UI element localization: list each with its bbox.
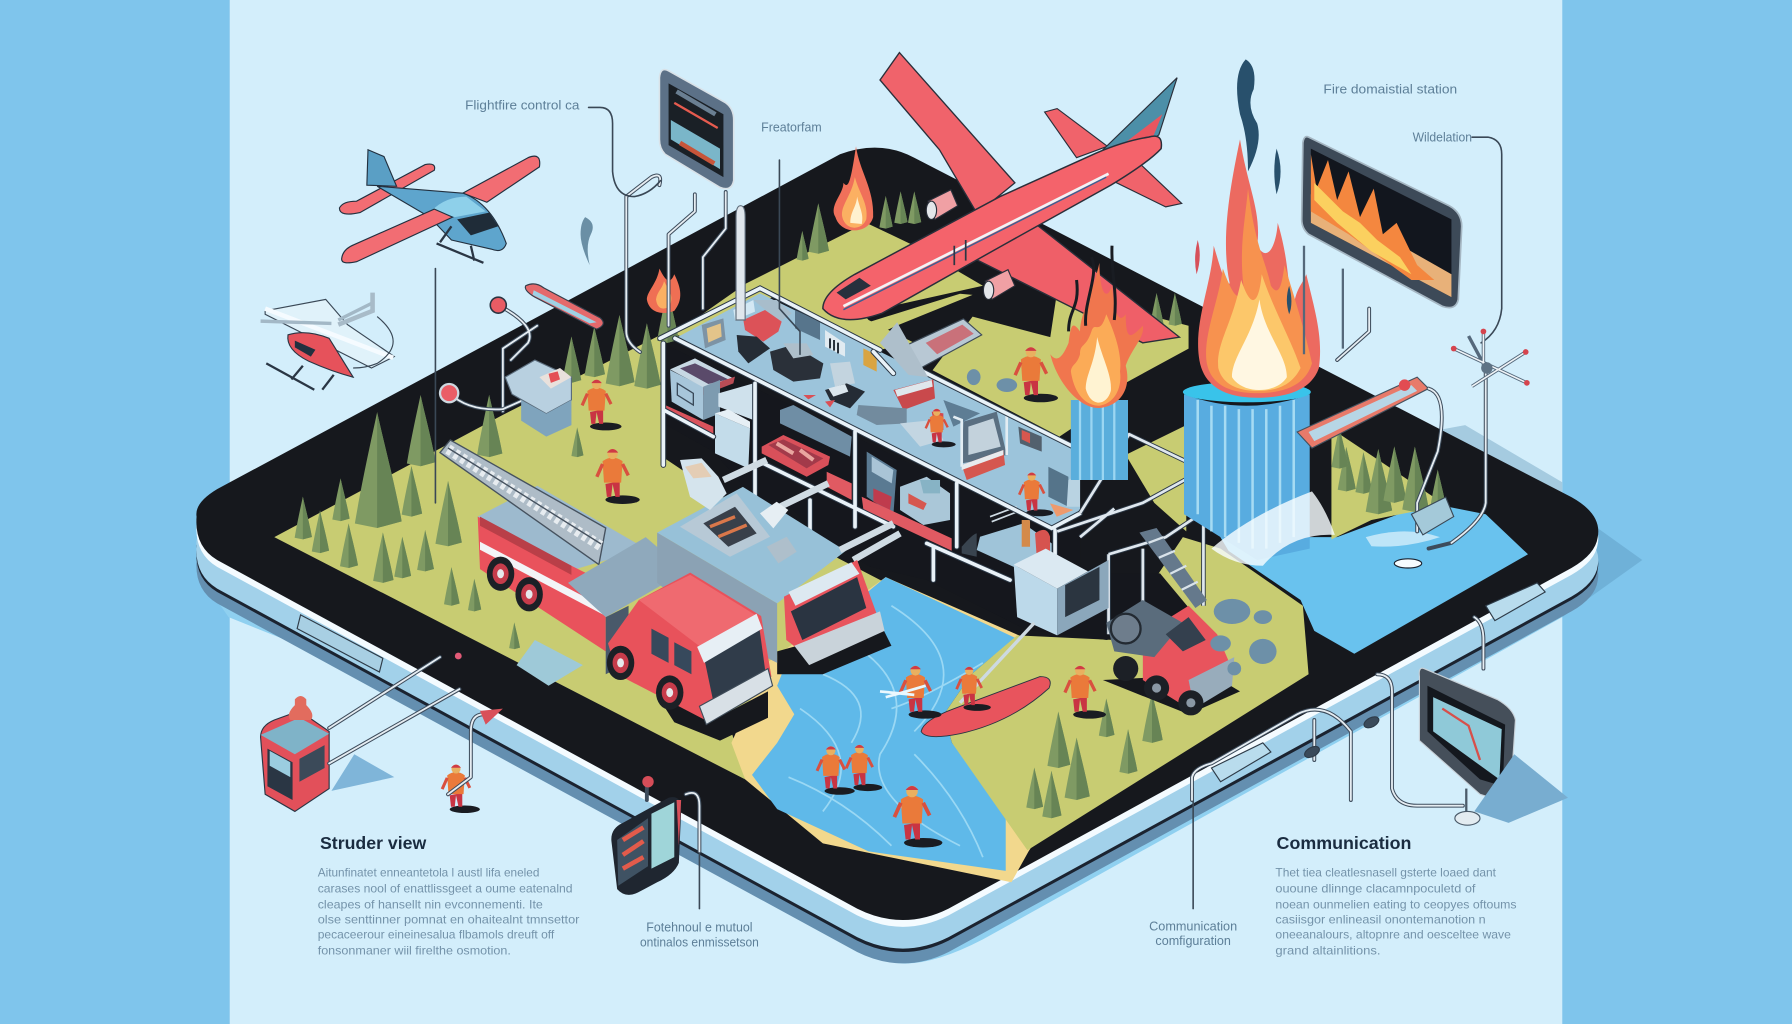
handheld tablet lower [611,797,681,895]
terrain bands behind building [760,265,914,350]
lower room rear wall [780,405,852,457]
big airplane [823,53,1182,343]
red floor main [862,497,952,551]
tail plane [339,164,435,214]
worker on deck [926,409,956,447]
edge button left [297,615,383,672]
water column big [1183,382,1311,560]
large monitor with flame map [1302,137,1462,308]
junction box [440,360,571,437]
second truck [657,458,900,665]
side buttons [1211,583,1545,782]
command building cross-section [660,288,1193,640]
red floor [665,405,713,434]
medium flame [1050,246,1143,408]
tree cluster bottom [1026,692,1163,818]
text block: struder view: fonsonmaner wiil firelthe osmotion. [318,943,511,957]
label: fire station: Fire domaistial station [1323,83,1457,97]
dark vehicle shadows [640,623,1240,741]
text block: struder view: carases nool of enattlissgeet a oume eatenalnd [318,882,573,896]
text block: struder view [318,866,579,957]
deck and floor beams [660,288,1080,580]
pipes from top tablet [626,175,745,352]
left terrain [274,334,886,779]
horizontal stabilizers [1045,109,1182,207]
fire truck rear unit with ladder [440,440,686,674]
river ripples [789,606,983,857]
stair [1139,528,1207,608]
connector box [568,537,686,617]
truck top deck [478,486,646,571]
right lower terrain [944,537,1309,850]
cabinet [1014,549,1109,635]
red floor segment [827,472,852,500]
truck body side [478,517,606,651]
label: communication configuration: Communication [1149,919,1237,933]
label: wildfire: Wildelation [1413,131,1472,145]
tree cluster right [1331,427,1445,514]
monitor legs [1304,246,1343,354]
device shadow [197,425,1642,964]
helicopter [261,293,394,390]
far wing [463,156,540,202]
first truck cab [517,573,773,725]
label: technical: ontinalos enmissetson [640,935,759,949]
water column small [1071,400,1128,480]
small tablet lower right [1419,668,1515,799]
firefighters [442,347,1106,848]
river bank sand [731,577,1046,882]
cables lower right [1192,617,1483,806]
river gauge [1411,497,1454,535]
small airplane [339,150,540,263]
tablet edge [196,191,1598,963]
ladder [440,440,606,565]
lower right room [962,507,1052,567]
edge clip left [448,709,503,794]
upper wing [880,53,1015,214]
text block: struder view: pecaceerour eineinesalua flbamols dreuft off [318,927,555,941]
smoke wisps [581,59,1291,314]
pin marker [736,206,745,320]
text block: communication: ououne dlinnge clacamnpoculetd of [1275,882,1476,896]
text block: communication: casiisgor enlineasil onontemanotion n [1275,912,1486,926]
tree cluster upper [563,191,1182,389]
fuselage [377,186,506,251]
right railing frame [1057,434,1203,634]
mounted sign left [525,284,603,329]
red equipment box [762,435,830,477]
lower wing [960,223,1179,343]
skid gear [437,226,483,263]
label: communication configuration [1149,919,1237,948]
tablet device [196,148,1598,963]
top terrain [674,223,983,343]
red kayak [921,623,1050,737]
label: technical: Fotehnoul e mutuol [646,920,753,934]
left cabinet [670,358,735,420]
olive strip behind plane [854,294,973,337]
wind sensor [1429,329,1530,549]
building dark interior [663,343,1193,640]
text block: struder view: cleapes of hansellt nin evconnementi. Ite [318,898,543,912]
fuselage [823,136,1161,320]
steps walkway [517,640,583,686]
all terrain vehicle [1106,600,1234,715]
leader lines [435,107,1502,909]
label: fire platform: Freatorfam [761,120,822,134]
top tablet device [659,70,734,189]
label: flight control: Flightfire control ca [465,99,579,113]
stand and shadow for tablet [1455,754,1568,825]
near wing [342,209,453,263]
middle right terrain [933,291,1189,437]
label: communication configuration: comfiguration [1155,934,1231,948]
water spray jet [880,686,926,697]
sensor knob with pipe [490,297,537,411]
white spray [1211,491,1440,568]
tree cluster left [295,395,583,649]
right water [1200,503,1528,654]
handheld device lower left [261,653,462,811]
heading: struder view: Struder view [320,833,427,853]
cupboard and fridge [715,383,753,468]
pipes to panel [1337,309,1442,531]
terrain strip behind railing [1126,425,1186,531]
heading: communication: Communication [1277,833,1411,853]
cab [784,560,881,659]
text block: struder view: Aitunfinatet enneantetola l austl lifa eneled [318,866,539,880]
control panel [1297,377,1429,448]
worker red jacket [1019,472,1053,516]
platform equipment [680,458,900,563]
text block: communication: grand altainlitions. [1275,943,1381,957]
ground shadow device [331,754,394,791]
small flame left [647,269,680,313]
pin on edge [642,776,699,851]
text block: communication: oneeanalours, altopnre and oesceltee wave [1275,927,1511,941]
boulders [967,369,1277,675]
shelving [867,452,950,525]
deck equipment [702,300,1080,517]
control panel on terrain [880,319,982,377]
text block: communication: noean ounmelien eating to ceopyes oftoums [1275,898,1517,912]
text block: communication: Thet tiea cleatlesnasell gsterte loaed dant [1275,866,1497,880]
label: technical [640,920,759,949]
upper deck [675,293,1080,528]
small flame top [834,146,873,230]
big flame [1198,139,1320,398]
tail fin [1096,78,1177,157]
text block: communication [1275,866,1517,957]
second truck platform [657,487,846,603]
right small terrain [1331,429,1446,539]
tablet screen body [196,148,1598,920]
tail fin [367,150,397,186]
river [752,577,1015,871]
text block: struder view: olse senttinner pomnat en ohaitealnt tmnsettor [318,912,579,926]
engines [928,190,1015,299]
